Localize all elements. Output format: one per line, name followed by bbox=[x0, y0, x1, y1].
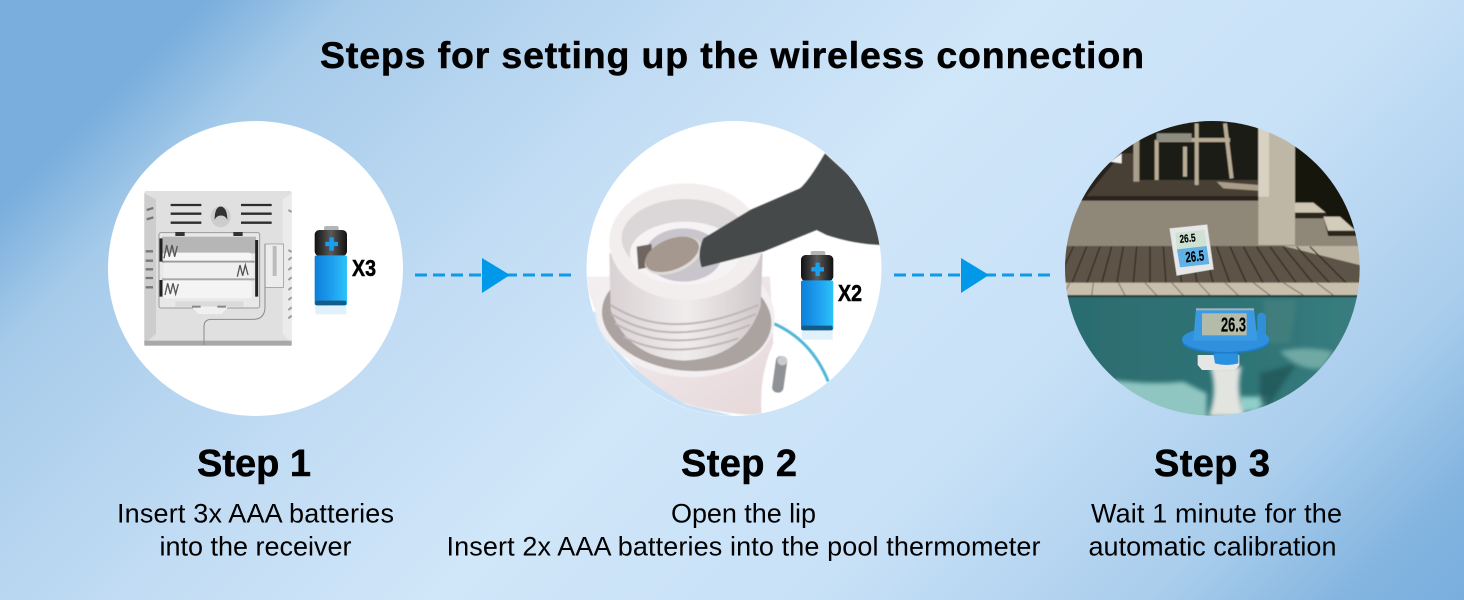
x3 battery count: X3 bbox=[352, 255, 376, 281]
step 2 caption bbox=[446, 443, 1040, 562]
step 1 caption bbox=[117, 443, 394, 562]
arrow: step 1 to step 2 bbox=[415, 258, 572, 293]
step 2 caption: Insert 2x AAA batteries into the pool thermometer bbox=[446, 532, 1040, 562]
receiver back with battery compartment bbox=[144, 191, 292, 346]
step 1 caption: Step 1 bbox=[197, 443, 311, 485]
pool thermometer float: 26.3 bbox=[1221, 314, 1246, 337]
x2 battery count: X2 bbox=[838, 280, 862, 306]
icon: battery bbox=[801, 251, 833, 340]
step 2 white circle bbox=[586, 121, 882, 416]
step 1 caption: into the receiver bbox=[160, 532, 352, 562]
step 3 caption: automatic calibration bbox=[1088, 532, 1336, 562]
receiver display in scene bbox=[1169, 224, 1214, 276]
arrow: step 2 to step 3 bbox=[894, 258, 1051, 293]
step 2 caption: Open the lip bbox=[671, 498, 816, 528]
infographic canvas bbox=[108, 40, 1360, 561]
panel: step 3 bbox=[1065, 121, 1360, 416]
step 1 white circle bbox=[108, 121, 403, 416]
panel: step 1 bbox=[108, 121, 403, 416]
photo: thermometer opened with tool bbox=[583, 153, 887, 423]
pool thermometer float bbox=[1182, 308, 1269, 370]
title: Steps for setting up the wireless connection bbox=[320, 34, 1144, 76]
step 3 caption bbox=[1088, 443, 1342, 562]
icon: battery bbox=[315, 226, 347, 314]
step 3 caption: Step 3 bbox=[1154, 443, 1270, 485]
receiver display in scene: 26.5 bbox=[1185, 248, 1205, 266]
photo: pool scene bbox=[1065, 121, 1360, 416]
receiver display in scene: 26.5 bbox=[1179, 232, 1196, 246]
step 3 caption: Wait 1 minute for the bbox=[1091, 498, 1342, 528]
step 1 caption: Insert 3x AAA batteries bbox=[117, 498, 394, 528]
step 2 caption: Step 2 bbox=[681, 443, 797, 485]
panel: step 2 bbox=[583, 121, 887, 423]
